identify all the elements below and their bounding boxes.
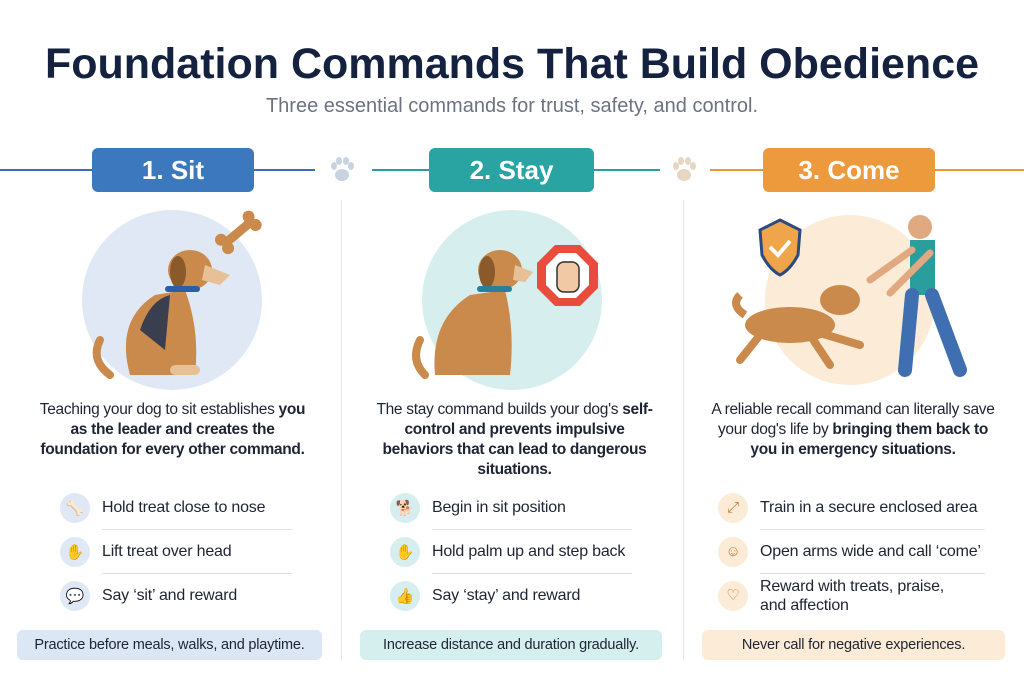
illustration: sitting dog with bone [82, 210, 262, 390]
tab: come [763, 148, 935, 192]
tab: sit: 1. Sit [142, 155, 204, 185]
icon: paw 2 [673, 157, 696, 181]
tab: come: 3. Come [798, 155, 900, 185]
tab: sit [92, 148, 254, 192]
steps: stay: ✋ [396, 544, 414, 560]
steps: stay [390, 493, 632, 611]
text: come description: A reliable recall command can literally save your dog's life by bringing them back to you in emergency situations. [711, 401, 995, 458]
steps: sit: ✋ [66, 544, 84, 560]
steps: stay: Begin in sit position [432, 498, 566, 516]
steps: sit: Hold treat close to nose [102, 498, 265, 516]
text: stay description: The stay command builds your dog's self-control and prevents impulsive behaviors that can lead to dangerous situations. [376, 401, 653, 478]
illustration: dog with stop sign [412, 210, 602, 390]
note: sit [17, 630, 322, 660]
header lines [0, 169, 1024, 171]
illustration: running dog and person [732, 215, 967, 385]
steps: come: Open arms wide and call ‘come’ [760, 542, 981, 560]
steps: come: and affection [760, 596, 849, 614]
subtitle: Three essential commands for trust, safety, and control. [266, 95, 758, 117]
tab: stay [429, 148, 594, 192]
steps: sit: 💬 [66, 588, 84, 604]
steps: come [718, 493, 985, 614]
note: stay: Increase distance and duration gradually. [383, 637, 639, 653]
steps: come: ♡ [726, 587, 740, 604]
steps: come: ⤢ [727, 499, 739, 516]
note: come [702, 630, 1005, 660]
steps: stay: Say ‘stay’ and reward [432, 586, 580, 604]
steps: sit: 🦴 [66, 500, 84, 516]
steps: come: ☺ [725, 543, 741, 560]
note: come: Never call for negative experiences. [742, 637, 965, 653]
steps: stay: 🐕 [396, 500, 414, 516]
steps: come: Train in a secure enclosed area [760, 498, 977, 516]
steps: stay: 👍 [396, 588, 414, 604]
steps: sit: Say ‘sit’ and reward [102, 586, 237, 604]
text: sit description: Teaching your dog to sit establishes you as the leader and creates the foundation for every other command. [40, 401, 305, 458]
note: stay [360, 630, 662, 660]
tab: stay: 2. Stay [470, 155, 553, 185]
icon: paw 1 [331, 157, 354, 181]
steps: sit: Lift treat over head [102, 542, 231, 560]
steps: sit [60, 493, 292, 611]
steps: stay: Hold palm up and step back [432, 542, 625, 560]
note: sit: Practice before meals, walks, and playtime. [34, 637, 305, 653]
title: Foundation Commands That Build Obedience [45, 40, 979, 88]
steps: come: Reward with treats, praise, [760, 578, 944, 594]
